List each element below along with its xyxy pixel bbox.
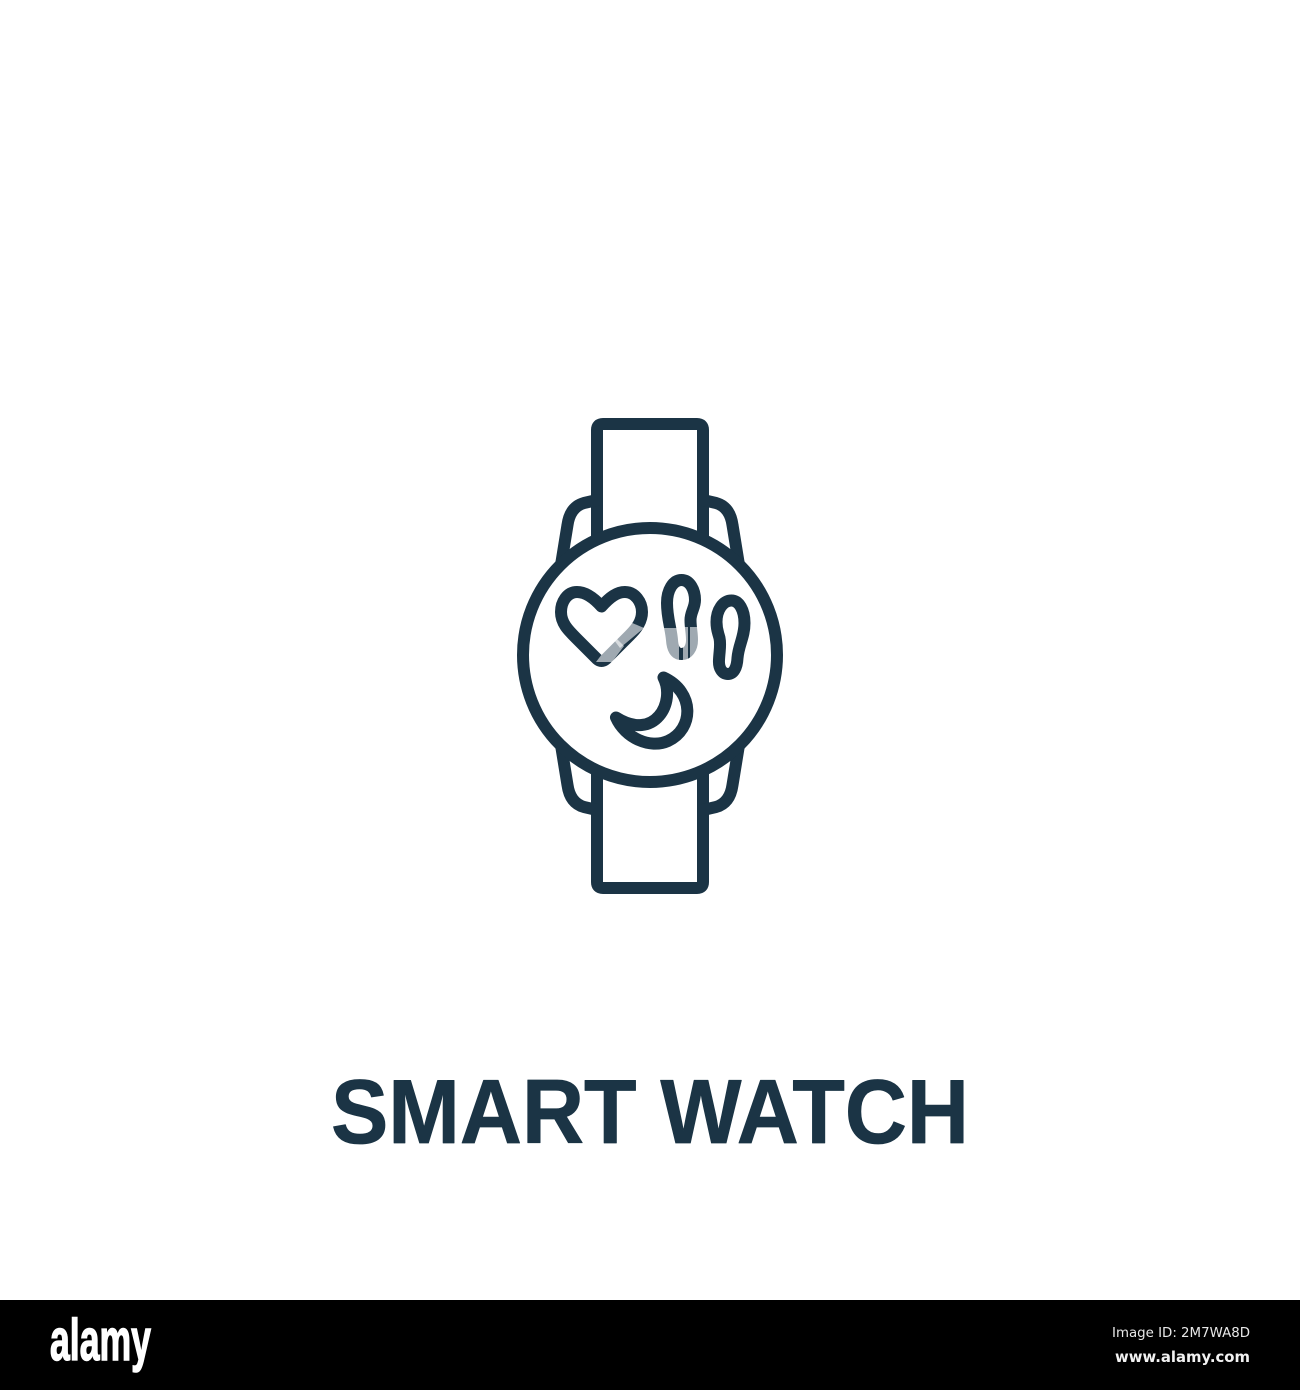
- icon: footprint right: [716, 600, 744, 674]
- icon: smart watch: [523, 424, 777, 888]
- footer bar: [0, 1300, 1300, 1390]
- watch face: [523, 528, 777, 782]
- watermark overlay: [596, 622, 699, 662]
- icon: footprint left: [667, 580, 695, 654]
- icon: crescent moon: [616, 678, 687, 744]
- image id: Image ID: 2M7WA8D: [1112, 1325, 1250, 1341]
- title: SMART WATCH: [331, 1062, 969, 1163]
- watch strap: bottom: [597, 770, 703, 888]
- icon: heart: [561, 592, 642, 661]
- website: www.alamy.com: [1115, 1348, 1250, 1366]
- watch strap: top: [597, 424, 703, 540]
- watch lugs: [561, 500, 739, 810]
- footer logo: alamy: [50, 1308, 151, 1373]
